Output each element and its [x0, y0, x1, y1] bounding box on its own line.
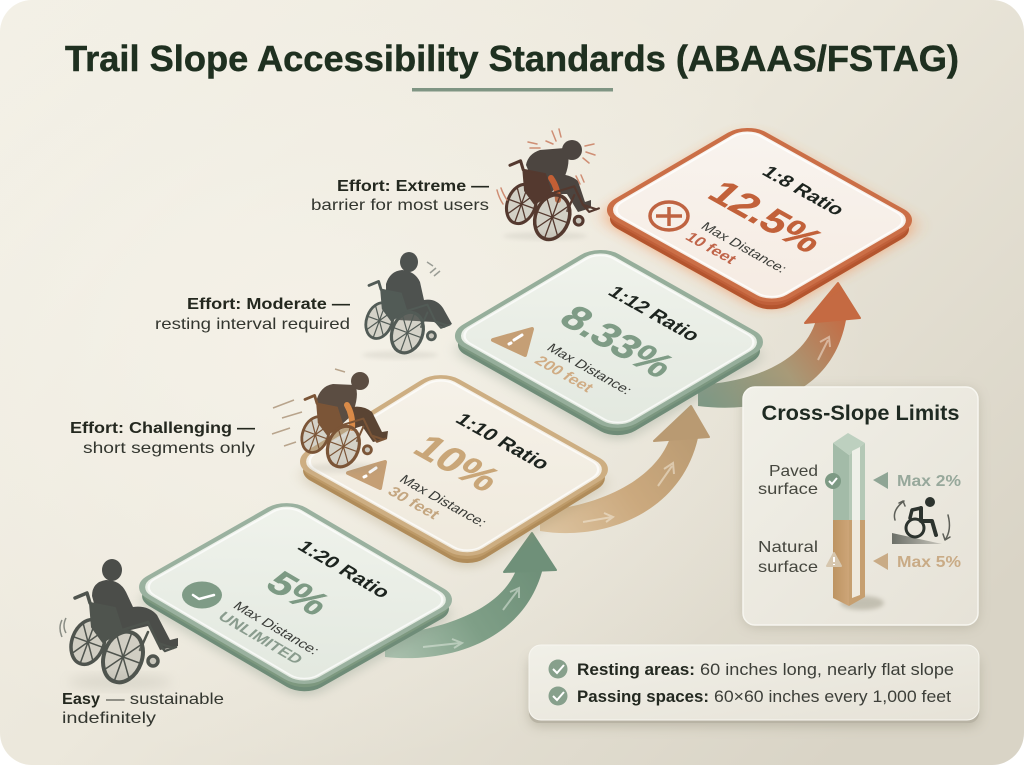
- slope column: [833, 433, 884, 610]
- percentage: 12.5%: [699, 174, 833, 260]
- icon: paved check: [825, 473, 841, 489]
- panel: 1:10 ratio card: [293, 371, 615, 574]
- panel: resting and passing notes: [529, 645, 979, 726]
- panel heading: Cross-Slope Limits: [762, 402, 960, 425]
- natural limit marker: [873, 553, 961, 571]
- max distance label: Max Distance:: [229, 599, 322, 658]
- figure: moderate wheelchair user: [361, 252, 452, 359]
- natural surface label: [758, 539, 818, 576]
- icon: wheelchair on ramp: [892, 497, 950, 544]
- effort label: extreme: barrier for most users: [311, 197, 489, 214]
- percentage: 8.33%: [551, 299, 683, 385]
- panel: 1:12 ratio card: [448, 246, 770, 446]
- arrow: 10% to 8.33%: [540, 406, 709, 533]
- max distance value: UNLIMITED: [214, 609, 306, 667]
- icon: warning triangle: [493, 329, 532, 355]
- icon: natural warning: [827, 553, 841, 566]
- effort label: easy: [62, 691, 224, 727]
- arrow: 8.33% to 12.5%: [698, 283, 860, 408]
- max distance value: 10 feet: [681, 230, 740, 267]
- figure: challenging wheelchair user: [272, 369, 388, 473]
- percentage: 5%: [257, 565, 338, 622]
- icon: warning triangle: [348, 462, 385, 488]
- effort label: moderate: Effort: Moderate —: [187, 296, 350, 313]
- natural surface label: Natural: [758, 539, 818, 556]
- ratio label: 1:20 Ratio: [293, 537, 394, 602]
- max distance value: 200 feet: [531, 353, 598, 396]
- max distance label: Max Distance:: [698, 219, 791, 275]
- panel: 1:8 ratio card: [600, 124, 919, 315]
- max distance label: Max Distance:: [543, 341, 635, 397]
- note: passing spaces: 60×60 inches every 1,000 feet: [714, 687, 951, 706]
- note: resting areas: [548, 660, 954, 679]
- effort label: moderate: [155, 296, 350, 333]
- effort label: moderate: resting interval required: [155, 316, 350, 333]
- paved limit marker: [873, 472, 961, 490]
- ratio label: 1:8 Ratio: [757, 163, 849, 219]
- figure: extreme wheelchair user: [497, 129, 599, 244]
- effort label: extreme: [311, 178, 489, 214]
- ratio label: 1:12 Ratio: [603, 283, 704, 345]
- note: passing spaces: [548, 686, 951, 706]
- effort label: challenging: Effort: Challenging —: [70, 420, 255, 437]
- figure: easy wheelchair user: [60, 559, 178, 689]
- title: Trail Slope Accessibility Standards (ABAAS/FSTAG): [65, 38, 959, 79]
- effort label: easy: — sustainable: [106, 691, 224, 708]
- arrow: 5% to 10%: [385, 533, 556, 658]
- paved surface label: Paved: [769, 463, 818, 480]
- note: resting areas: Resting areas:: [577, 660, 695, 679]
- max distance label: Max Distance:: [396, 473, 490, 530]
- icon: prohibited: [650, 202, 688, 230]
- ratio label: 1:10 Ratio: [451, 410, 554, 474]
- effort label: easy: indefinitely: [62, 710, 156, 727]
- note: resting areas: 60 inches long, nearly flat slope: [700, 660, 954, 679]
- panel: 1:20 ratio card: [132, 499, 459, 702]
- effort label: extreme: Effort: Extreme —: [337, 178, 489, 195]
- note: passing spaces: Passing spaces:: [577, 687, 709, 706]
- effort label: easy: Easy: [62, 691, 100, 708]
- paved surface label: [758, 463, 818, 498]
- effort label: challenging: [70, 420, 255, 457]
- max distance value: 30 feet: [384, 484, 444, 523]
- effort label: challenging: short segments only: [83, 440, 255, 457]
- natural limit marker: Max 5%: [897, 554, 961, 571]
- percentage: 10%: [405, 427, 510, 499]
- panel: cross-slope limits: [743, 387, 978, 627]
- paved surface label: surface: [758, 481, 818, 498]
- icon: check badge: [182, 582, 222, 608]
- natural surface label: surface: [758, 559, 818, 576]
- paved limit marker: Max 2%: [897, 473, 961, 490]
